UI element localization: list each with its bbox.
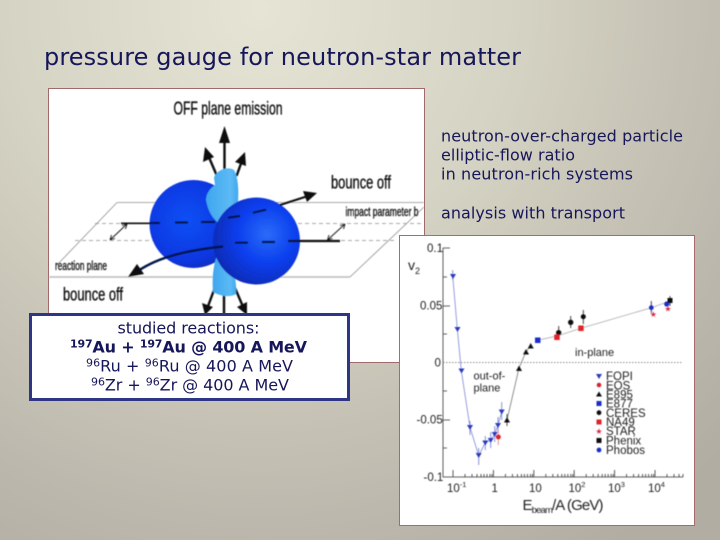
line: ruthenium reaction: Ru + bbox=[100, 356, 145, 376]
legend: Phobos bbox=[606, 445, 645, 457]
label: reaction plane: reaction plane bbox=[55, 259, 107, 273]
line: zirconium reaction: Zr + bbox=[105, 376, 146, 394]
text block: flow ratio description: analysis with transport bbox=[441, 204, 625, 222]
x axis labels: -1 bbox=[460, 480, 466, 489]
back sphere bbox=[150, 180, 238, 268]
line: gold reaction: Au @ 400 A MeV bbox=[162, 338, 308, 356]
x axis labels: 10 bbox=[447, 483, 460, 495]
series: EOS bbox=[496, 434, 501, 440]
light blue emission lobe bottom bbox=[213, 258, 236, 296]
legend: Phenix bbox=[606, 436, 641, 448]
line: gold reaction: 197 bbox=[70, 338, 93, 350]
x axis title: beam bbox=[532, 505, 553, 516]
axes bbox=[443, 248, 683, 477]
x axis labels: 1 bbox=[492, 483, 498, 495]
legend: NA49 bbox=[606, 417, 635, 429]
series: NA49 bbox=[554, 326, 584, 340]
bounce-off arrows bbox=[128, 191, 317, 277]
legend bbox=[595, 371, 646, 457]
legend: ★ bbox=[595, 427, 603, 436]
x axis labels: 10 bbox=[608, 483, 621, 495]
series: Phenix bbox=[668, 298, 672, 303]
line: ruthenium reaction: 96 bbox=[145, 356, 159, 370]
series: E877 bbox=[535, 338, 540, 343]
x axis labels: 10 bbox=[648, 483, 661, 495]
off-plane arrows below bbox=[202, 288, 247, 320]
series: FOPI bbox=[450, 274, 505, 458]
chart: v2 versus beam energy bbox=[400, 236, 694, 526]
legend: E895 bbox=[606, 390, 633, 402]
beam lines bbox=[121, 210, 340, 243]
label: impact parameter: impact parameter b bbox=[346, 205, 419, 219]
x axis labels: 10 bbox=[568, 483, 581, 495]
line: ruthenium reaction: Ru @ 400 A MeV bbox=[159, 356, 293, 376]
y axis title: v bbox=[408, 257, 415, 273]
x axis labels: 10 bbox=[529, 483, 542, 495]
legend: STAR bbox=[606, 426, 636, 438]
legend: FOPI bbox=[606, 371, 633, 383]
x axis labels: 3 bbox=[621, 480, 625, 489]
y axis labels: -0.1 bbox=[424, 472, 443, 484]
series: E895 bbox=[504, 343, 534, 422]
light blue emission lobe top bbox=[206, 168, 238, 226]
series: STAR: ★ bbox=[650, 310, 657, 319]
front sphere bbox=[213, 198, 300, 284]
legend: CERES bbox=[606, 408, 646, 420]
y axis labels bbox=[416, 243, 443, 484]
region labels: plane bbox=[474, 382, 500, 394]
y axis title: 2 bbox=[415, 266, 420, 276]
text block: flow ratio description: elliptic-flow ratio bbox=[441, 146, 575, 164]
trend lines bbox=[453, 276, 670, 456]
label: bounce off right: bounce off bbox=[331, 172, 392, 192]
callout: studied reactions bbox=[30, 314, 348, 400]
y axis labels: 0 bbox=[434, 358, 441, 370]
reaction plane bbox=[49, 202, 424, 277]
label: off plane emission: OFF plane emission bbox=[174, 98, 282, 118]
error bars bbox=[453, 270, 670, 465]
line: heading: studied reactions: bbox=[118, 318, 260, 338]
text block: flow ratio description bbox=[441, 126, 683, 222]
line: zirconium reaction: Zr @ 400 A MeV bbox=[160, 376, 289, 394]
panel: off-plane emission diagram bbox=[48, 88, 424, 362]
region labels: out-of- bbox=[474, 370, 506, 382]
text block: flow ratio description: neutron-over-charged particle bbox=[441, 126, 683, 146]
text block: flow ratio description: in neutron-rich systems bbox=[441, 164, 633, 184]
line: zirconium reaction: 96 bbox=[146, 376, 160, 388]
line: gold reaction: 197 bbox=[140, 338, 162, 350]
series: CERES bbox=[556, 314, 586, 335]
series: Phobos bbox=[649, 301, 669, 310]
off-plane arrows above bbox=[203, 126, 246, 176]
y axis labels: 0.05 bbox=[420, 300, 442, 312]
legend: EOS bbox=[606, 380, 631, 392]
series: STAR: ★ bbox=[664, 304, 672, 314]
title: pressure gauge for neutron-star matter bbox=[44, 43, 521, 71]
y axis labels: 0.1 bbox=[427, 243, 443, 255]
x axis labels: 4 bbox=[661, 480, 665, 489]
x axis title: E bbox=[522, 497, 533, 514]
impact parameter arrows bbox=[110, 224, 345, 240]
series: STAR bbox=[650, 304, 672, 319]
region labels: in-plane bbox=[575, 347, 614, 359]
x axis labels bbox=[447, 480, 665, 495]
y axis labels: -0.05 bbox=[416, 414, 443, 426]
line: ruthenium reaction: 96 bbox=[86, 356, 100, 370]
region labels bbox=[474, 347, 614, 394]
legend: E877 bbox=[606, 398, 633, 410]
line: gold reaction: Au + bbox=[92, 338, 140, 356]
line: zirconium reaction: 96 bbox=[91, 376, 105, 388]
label: bounce off left: bounce off bbox=[63, 284, 124, 304]
x axis labels: 2 bbox=[581, 480, 585, 489]
x axis title: /A (GeV) bbox=[552, 497, 604, 514]
